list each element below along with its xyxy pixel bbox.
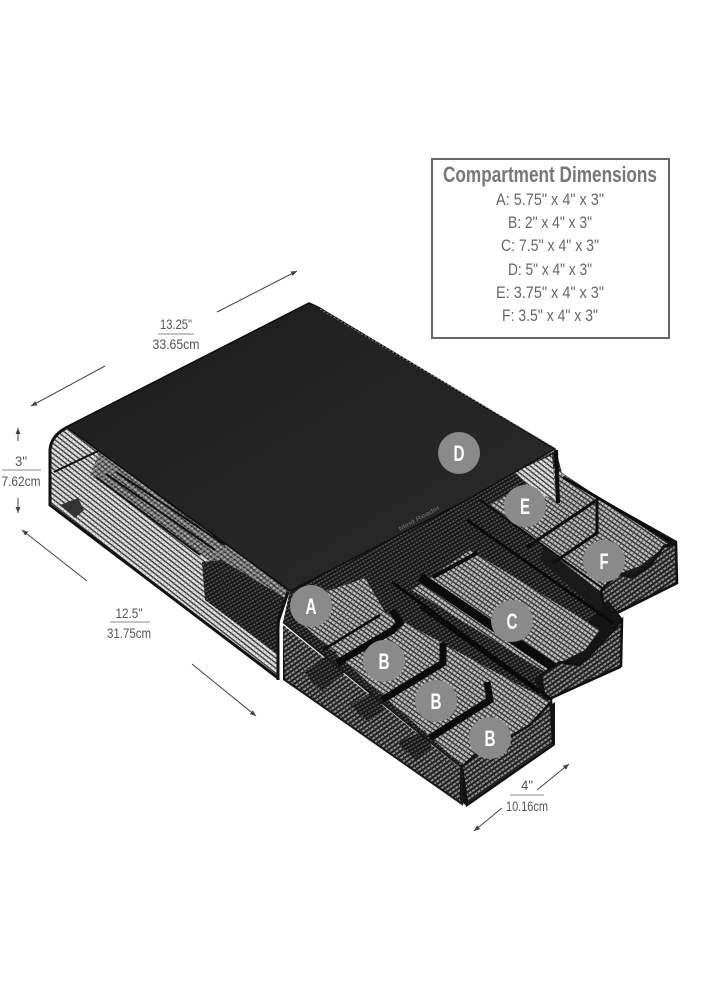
marker B 3: B bbox=[484, 726, 496, 751]
dimension: drawer width 4: 4" bbox=[521, 777, 533, 793]
brand mark: Mind Reader bbox=[398, 505, 441, 533]
dimension list: A: 5.75" x 4" x 3" bbox=[496, 190, 604, 209]
marker A bbox=[290, 585, 332, 627]
dimension: depth 12.5: 12.5" bbox=[116, 605, 143, 621]
dimension list: C: 7.5" x 4" x 3" bbox=[501, 236, 599, 255]
panel: compartment dimensions bbox=[432, 159, 669, 338]
middle drawer: C bbox=[412, 520, 622, 702]
marker B 3 bbox=[469, 717, 511, 759]
bottom drawer: A and B bbox=[283, 578, 555, 806]
dimension list bbox=[496, 190, 604, 325]
marker E bbox=[504, 485, 546, 527]
dimension list: D: 5" x 4" x 3" bbox=[508, 260, 592, 279]
dimension: height 3: 7.62cm bbox=[2, 473, 40, 489]
dimension list: B: 2" x 4" x 3" bbox=[508, 213, 592, 232]
drawer underlay bbox=[283, 450, 622, 768]
dimension: width 13.25: 33.65cm bbox=[152, 336, 200, 352]
marker C: C bbox=[506, 609, 518, 634]
dimension list: E: 3.75" x 4" x 3" bbox=[496, 283, 604, 302]
marker B 1 bbox=[363, 640, 405, 682]
top drawer: E and F bbox=[480, 450, 678, 620]
marker D: D bbox=[454, 441, 464, 466]
marker C bbox=[491, 600, 533, 642]
dimension: depth 12.5: 31.75cm bbox=[107, 625, 151, 641]
dimension: depth 12.5 bbox=[22, 530, 256, 716]
marker D bbox=[438, 432, 480, 474]
marker F bbox=[583, 540, 625, 582]
marker E: E bbox=[520, 494, 530, 519]
dimension list: F: 3.5" x 4" x 3" bbox=[502, 306, 598, 325]
dimension: width 13.25: 13.25" bbox=[160, 316, 192, 332]
marker A: A bbox=[306, 594, 317, 619]
dimension: height 3: 3" bbox=[15, 453, 27, 469]
marker F: F bbox=[600, 549, 608, 574]
dimension: drawer width 4 bbox=[474, 764, 569, 831]
marker B 1: B bbox=[378, 649, 390, 674]
housing side mesh bbox=[50, 428, 290, 680]
panel heading: Compartment Dimensions bbox=[443, 162, 657, 187]
dimension: drawer width 4: 10.16cm bbox=[506, 798, 548, 814]
compartment markers bbox=[290, 432, 625, 759]
product: mesh organizer bbox=[50, 303, 678, 806]
dimension: width 13.25 bbox=[31, 271, 297, 406]
top plate bbox=[66, 303, 555, 591]
dimension: height 3 bbox=[2, 428, 41, 513]
marker B 2: B bbox=[430, 689, 442, 714]
marker B 2 bbox=[415, 680, 457, 722]
